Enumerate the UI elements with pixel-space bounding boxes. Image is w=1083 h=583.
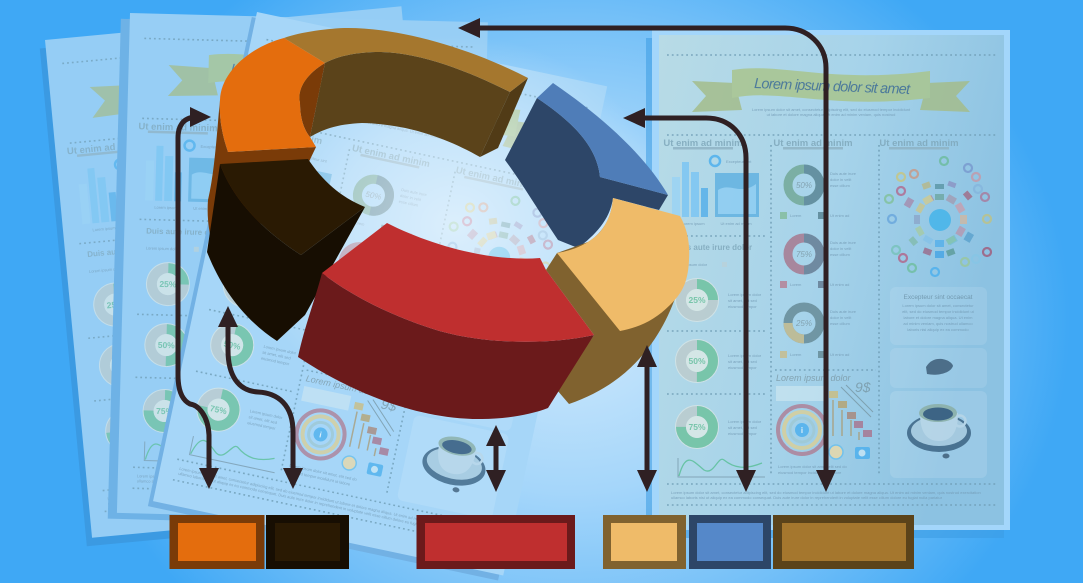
3D ring chart — [207, 28, 689, 419]
segment: black front face — [207, 164, 365, 341]
segment: orange top face — [220, 38, 325, 152]
arrow: red segment to key — [486, 425, 506, 492]
panel: right page — [646, 30, 1010, 538]
arrow: orange segment to key — [178, 107, 219, 489]
segment: blue top face — [537, 83, 668, 195]
panel: middle left page — [108, 13, 488, 528]
segment: orange inner wedge — [299, 63, 325, 137]
segment side: orange shadow — [208, 100, 316, 270]
segment: yellow top face — [557, 198, 689, 331]
key swatch: black — [266, 515, 349, 569]
panel: front left page — [148, 11, 607, 581]
centre glow — [200, 0, 720, 480]
key swatch: blue — [689, 515, 771, 569]
segment: red front face — [298, 273, 594, 419]
segment: brown end face — [480, 78, 528, 157]
arrow: brown segment to key — [458, 18, 836, 492]
panel: back left page — [39, 6, 449, 546]
arrow: blue segment to key — [623, 108, 756, 492]
arrow: black segment to key — [218, 306, 303, 489]
key swatch: brown — [773, 515, 914, 569]
key swatch: yellow — [603, 515, 686, 569]
segment: red top face — [322, 223, 594, 342]
arrow: yellow segment to key — [637, 345, 657, 492]
segment: blue dark face — [505, 98, 668, 248]
segment: brown inner wall — [310, 52, 510, 157]
segment: yellow side — [546, 198, 678, 404]
key swatch: red — [416, 515, 575, 569]
segment: black top face — [220, 159, 365, 255]
segment: brown top face — [284, 28, 528, 92]
key swatch: orange — [170, 515, 264, 569]
